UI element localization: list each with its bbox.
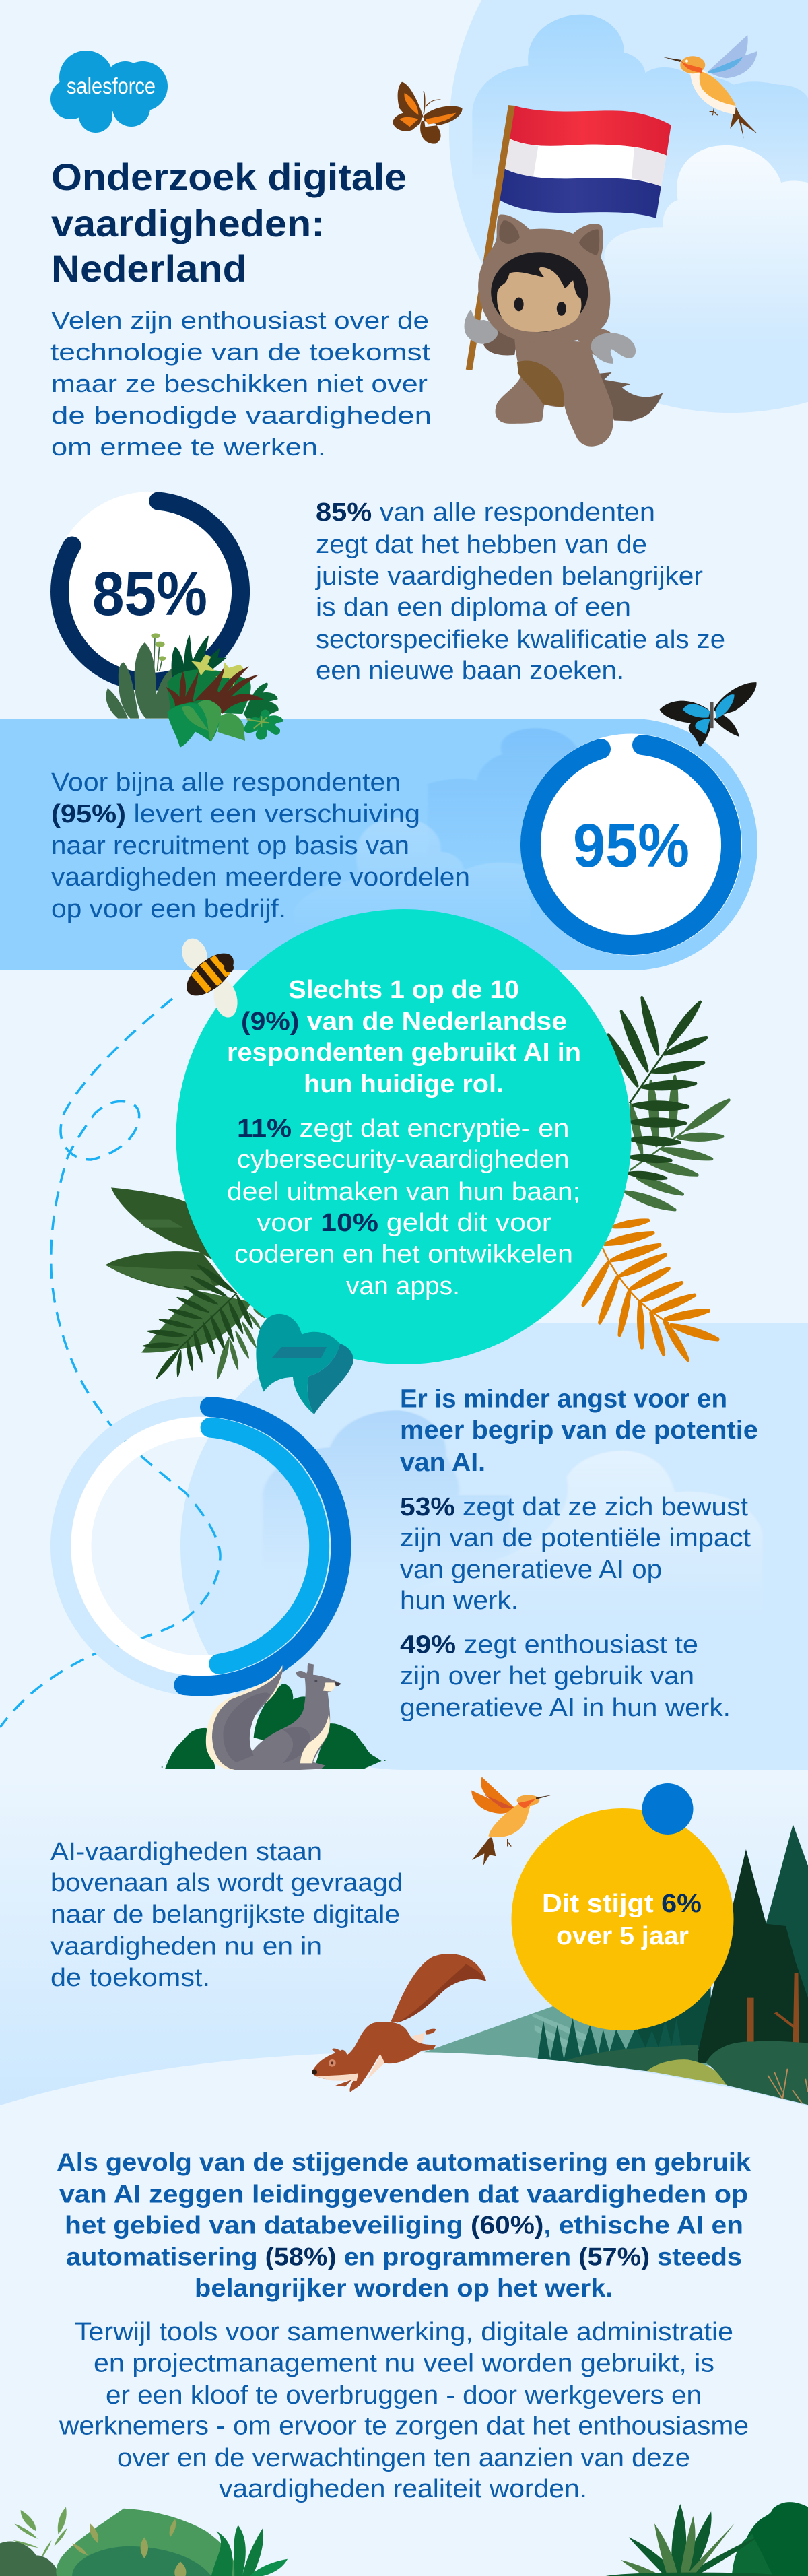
text: encryption and coding: voor 10% geldt dit voor [257,1209,551,1237]
title [51,156,407,290]
text: AI awareness: zijn over het gebruik van [400,1662,694,1690]
intro text: de benodigde vaardigheden [51,401,432,429]
heading: automation consequences: Als gevolg van de stijgende automatisering en gebruik [57,2148,751,2176]
text: 95% of respondents [51,768,470,923]
body [496,339,613,447]
belly [517,360,564,407]
illustration: palm fronds right [583,997,729,1360]
text: AI awareness: 53% zegt dat ze zich bewust [400,1493,748,1521]
panel: sky gradient section [0,1770,808,2120]
icon: teal heart leaves [256,1314,354,1414]
icon: blue butterfly [660,682,757,748]
chart: 85% donut: 85% [92,560,207,628]
text: only 1 in 10 use AI: (9%) van de Nederlandse [241,1008,567,1036]
squirrel hind leg [412,2033,425,2044]
text: encryption and coding: 11% zegt dat encryptie- en [237,1115,570,1143]
intro text: maar ze beschikken niet over [51,370,428,397]
logo: salesforce cloud: salesforce [67,73,156,98]
text: AI skills on top: vaardigheden nu en in [50,1933,322,1961]
callout: yellow circle 6%: over 5 jaar [556,1922,689,1950]
illustration: tropical leaves left [106,1187,265,1379]
text: 85% of respondents: is dan een diploma of een [316,593,631,622]
title: vaardigheden: [51,202,325,244]
text: 85% of respondents: zegt dat het hebben van de [316,531,647,559]
icon: monarch butterfly [393,82,462,144]
panel: white hill [0,2052,808,2576]
callout: yellow circle 6%: Dit stijgt 6% [542,1890,702,1918]
text: only 1 in 10 use AI: hun huidige rol. [304,1070,504,1098]
chart: 85% donut [50,492,250,691]
intro text: Velen zijn enthousiast over de [51,306,429,334]
text: closing paragraph: en projectmanagement nu veel worden gebruikt, is [94,2349,714,2377]
icon: orange hummingbird [471,1777,552,1865]
text: AI awareness: 49% zegt enthousiast te [400,1631,698,1659]
olive bush [647,2059,729,2086]
panel: header sky circle with clouds [449,0,808,413]
text: AI awareness: generatieve AI in hun werk. [400,1694,731,1722]
body [212,1663,341,1773]
text: closing paragraph: Terwijl tools voor samenwerking, digitale administratie [75,2318,733,2346]
icon: bee [178,935,241,1020]
title: Onderzoek digitale [51,156,407,198]
text: only 1 in 10 use AI [227,976,581,1098]
text: encryption and coding: van apps. [346,1272,460,1300]
text: AI skills on top [50,1838,403,1992]
illustration: plant group on band edge [106,633,283,748]
panel: blue band [0,719,758,970]
text: AI awareness: meer begrip van de potentie [400,1416,758,1445]
intro text [50,306,432,461]
bush [162,1684,386,1769]
heading: automation consequences: van AI zeggen leidinggevenden dat vaardigheden op [59,2181,748,2208]
green frond [625,1076,729,1210]
chart: 95% donut [520,734,742,955]
text: encryption and coding: coderen en het ontwikkelen [234,1241,573,1269]
text: 95% of respondents: op voor een bedrijf. [51,895,286,923]
text: AI skills on top: de toekomst. [50,1964,210,1992]
text: AI awareness: zijn van de potentiële impact [400,1524,751,1552]
title: Nederland [51,247,247,290]
53% arc [184,1407,341,1686]
text: AI skills on top: AI-vaardigheden staan [50,1838,322,1866]
text: closing paragraph: vaardigheden realiteit worden. [219,2475,587,2503]
text: 85% of respondents: juiste vaardigheden belangrijker [315,562,703,591]
text: only 1 in 10 use AI: respondenten gebruikt AI in [227,1038,581,1067]
text: AI awareness: hun werk. [400,1587,518,1615]
text: encryption and coding: cybersecurity-vaardigheden [237,1146,570,1174]
text: closing paragraph: er een kloof te overbruggen - door werkgevers en [106,2381,702,2410]
text: AI awareness: van generatieve AI op [400,1556,662,1584]
text: AI awareness [400,1385,758,1722]
squirrel body [312,2022,436,2092]
panel: teal circle [176,909,632,1364]
intro text: om ermee te werken. [51,433,326,461]
illustration: grey squirrel with bush [162,1663,386,1773]
heading: automation consequences: het gebied van databeveiliging (60%) , ethische AI en [65,2212,743,2239]
arrow: dashed bee flight path [0,999,220,1727]
text: encryption and coding: deel uitmaken van hun baan; [227,1178,580,1206]
logo: salesforce cloud [50,51,168,133]
head [478,215,610,343]
dark bush [706,2041,808,2110]
panel: pale blue band [180,1323,808,1770]
illustration: bottom plants right [603,2502,808,2576]
text: 95% of respondents: naar recruitment op basis van [51,832,409,860]
pine trees [696,1824,808,2063]
text: encryption and coding [227,1115,580,1300]
text: closing paragraph: over en de verwachtingen ten aanzien van deze [117,2444,690,2472]
text: AI awareness: van AI. [400,1449,485,1477]
dark frond [608,997,706,1179]
illustration: Astro mascot holding the Dutch flag [465,105,671,447]
text: AI skills on top: bovenaan als wordt gevraagd [50,1869,403,1897]
intro text: technologie van de toekomst [50,338,430,366]
flag [500,106,671,218]
text: 95% of respondents: Voor bijna alle respondenten [51,768,401,797]
text: AI skills on top: naar de belangrijkste digitale [50,1901,400,1929]
text: 85% of respondents [315,498,725,685]
text: AI awareness: Er is minder angst voor en [400,1385,727,1413]
text: 95% of respondents: vaardigheden meerdere voordelen [51,863,470,892]
left arm and glove [465,310,517,355]
49% arc [211,1428,319,1664]
text: 85% of respondents: 85% van alle respondenten [316,498,655,527]
illustration: bottom plants left [0,2507,288,2576]
flag pole [466,105,515,370]
illustration: forest and mountain [422,1824,808,2110]
squirrel tail [391,1954,486,2022]
chart: 95% donut: 95% [573,812,689,880]
text: 85% of respondents: sectorspecifieke kwalificatie als ze [316,626,725,654]
heading: automation consequences: belangrijker worden op het werk. [195,2274,613,2302]
right arm and glove [577,329,636,364]
icon: hummingbird top [663,35,758,139]
text: 95% of respondents: (95%) levert een verschuiving [51,800,420,828]
text: closing paragraph: werknemers - om ervoor te zorgen dat het enthousiasme [59,2412,749,2441]
tail [597,372,663,421]
text: closing paragraph [59,2318,749,2503]
text: only 1 in 10 use AI: Slechts 1 op de 10 [288,976,519,1004]
illustration: red squirrel [312,1954,486,2092]
orange frond [583,1220,718,1360]
blue dot [642,1783,694,1835]
callout: yellow circle 6% [512,1783,734,2030]
text: 85% of respondents: een nieuwe baan zoeken. [316,657,624,685]
heading: automation consequences: automatisering (58%) en programmeren (57%) steeds [66,2243,742,2271]
chart: AI awareness and enthusiasm rings [61,1406,341,1686]
heading: automation consequences [57,2148,751,2302]
tail [206,1665,282,1770]
